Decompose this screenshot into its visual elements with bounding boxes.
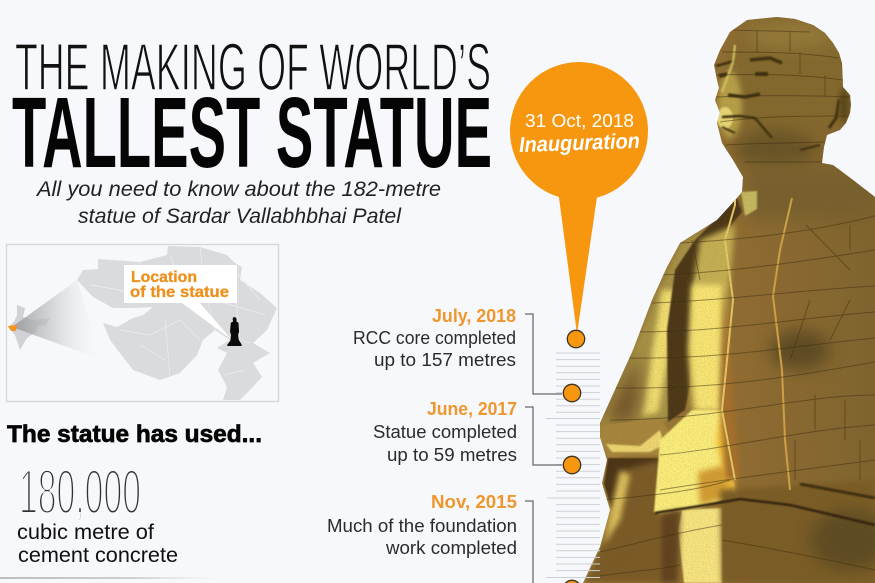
- zoom fan: [12, 280, 103, 360]
- milestone: July 2018: RCC core completed: [353, 327, 516, 348]
- label: of the statue: [130, 284, 229, 301]
- Gujarat highlight: [8, 325, 17, 331]
- milestone: July 2018: [353, 305, 516, 370]
- label: Location: [131, 269, 197, 286]
- title line 2: TALLEST STATUE: [12, 77, 492, 189]
- statue photograph: [580, 0, 875, 583]
- scarf dark band: [667, 198, 742, 422]
- timeline markers: [563, 330, 585, 583]
- left cloth: [600, 222, 717, 425]
- milestone: Nov 2015: [327, 491, 517, 558]
- subtitle: statue of Sardar Vallabhbhai Patel: [78, 204, 402, 228]
- dotted divider: [0, 577, 225, 579]
- chest light: [688, 225, 735, 410]
- India mini map: [8, 305, 50, 350]
- balloon: inauguration: Inauguration: [519, 129, 640, 157]
- balloon: inauguration: 31 Oct, 2018: [525, 110, 634, 131]
- robe fold: [600, 420, 668, 458]
- milestone: June 2017: June, 2017: [427, 398, 517, 419]
- label: [124, 265, 237, 303]
- balloon: inauguration: [510, 62, 648, 334]
- milestone: June 2017: Statue completed: [373, 421, 517, 442]
- milestone: July 2018: up to 157 metres: [374, 349, 516, 370]
- panel seams: [600, 30, 875, 576]
- stat: 180,000 cement concrete: cubic metre of: [17, 521, 154, 544]
- milestone: June 2017: up to 59 metres: [387, 444, 517, 465]
- collar: [741, 191, 757, 216]
- kurta edges: [722, 190, 735, 480]
- heading: the statue has used: The statue has used...: [7, 421, 262, 448]
- icon: statue silhouette: [227, 317, 242, 346]
- nose highlight: [722, 45, 735, 92]
- stat: 180,000 cement concrete: [17, 458, 178, 567]
- torso shadows: [770, 330, 830, 370]
- milestone: Nov 2015: Much of the foundation: [327, 515, 517, 536]
- milestone: June 2017: [373, 398, 517, 465]
- timeline scale ticks: [546, 353, 600, 578]
- lower arm: [585, 460, 660, 583]
- Gujarat map: [77, 246, 277, 400]
- stat: 180,000 cement concrete: cement concrete: [18, 544, 178, 567]
- pointer: [182, 303, 232, 340]
- waist crease: [655, 499, 875, 525]
- title line 1: THE MAKING OF WORLD’S: [15, 30, 491, 105]
- ear: [839, 88, 849, 122]
- milestone: Nov 2015: Nov, 2015: [431, 491, 517, 512]
- face features: [716, 58, 839, 150]
- map panel: [6, 244, 278, 402]
- lower bright panel: [678, 508, 722, 583]
- milestone: July 2018: July, 2018: [432, 305, 516, 326]
- bright shirt panel: [654, 410, 738, 514]
- title: [12, 30, 492, 189]
- shoulders: [745, 165, 875, 220]
- subtitle: All you need to know about the 182-metre: [35, 177, 441, 201]
- head shading: [733, 17, 848, 140]
- texture noise: [600, 34, 872, 583]
- timeline bracket lines: [525, 314, 562, 583]
- stat: 180,000 cement concrete: 180,000: [19, 458, 141, 528]
- milestone: Nov 2015: work completed: [385, 537, 517, 558]
- subtitle: [35, 177, 441, 228]
